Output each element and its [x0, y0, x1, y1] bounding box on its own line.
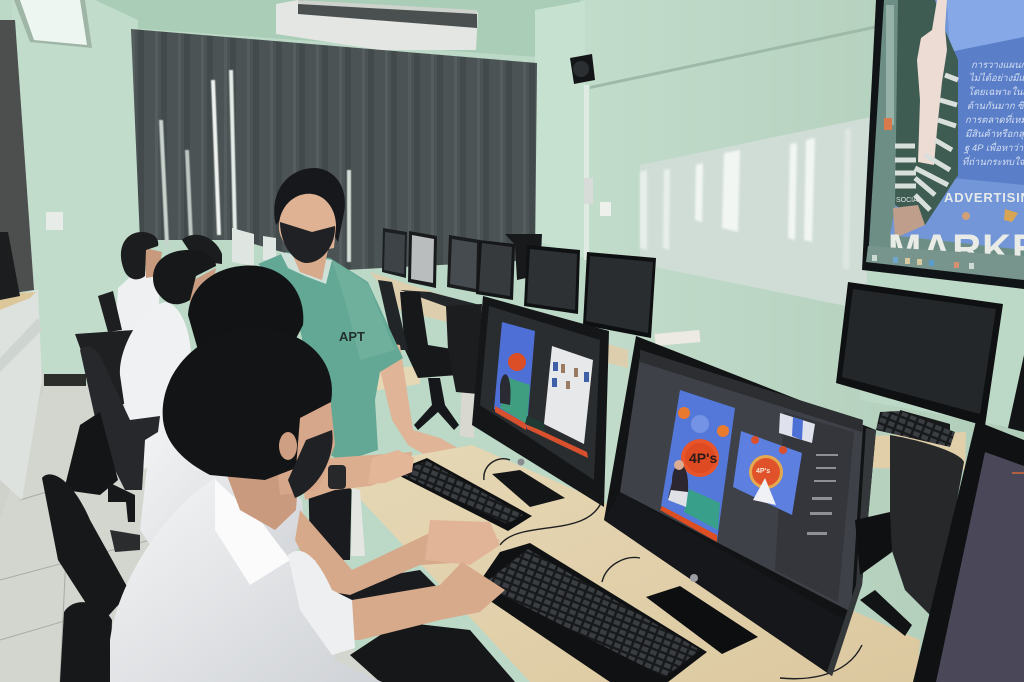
front student in white shirt: [42, 328, 515, 682]
rear seated students: [64, 232, 222, 522]
rear chairs: [42, 474, 140, 682]
poster A: 4P's: [689, 450, 717, 466]
dark trousers behind arms: [330, 570, 440, 610]
right tools panel: [775, 412, 854, 602]
screen taskbar: [866, 246, 1024, 280]
window blinds: [131, 29, 537, 270]
poster A: [660, 390, 735, 542]
poster on monitor: [494, 322, 535, 428]
whiteboard: [640, 117, 871, 310]
dark trousers: [350, 622, 515, 682]
right side monitor on far desk: [655, 282, 1024, 470]
corner monitor bottom right: [913, 421, 1024, 682]
left wall desk: [0, 232, 42, 500]
front keyboard: [474, 543, 707, 682]
keyboard near middle monitor: [392, 458, 532, 531]
large front monitor showing design software: [604, 336, 876, 676]
speaker: [570, 54, 595, 84]
ceiling light: [14, 0, 92, 48]
cables: [484, 459, 862, 679]
wall switch plates: [46, 178, 611, 230]
face mask: [288, 430, 333, 498]
teacher in green polo and face mask: [258, 168, 465, 560]
second monitor showing poster: [472, 296, 609, 507]
forearm on keyboard: [328, 562, 505, 640]
neck: [288, 245, 328, 280]
ear: [279, 432, 297, 460]
monitor stand: [492, 470, 565, 507]
hair: [274, 168, 345, 242]
back row of computer monitors: [232, 228, 656, 338]
face: [270, 395, 335, 495]
second seated student: [140, 265, 500, 610]
navigator thumbnail: [779, 413, 815, 443]
face: [279, 194, 336, 255]
neck: [225, 455, 300, 530]
student far back: [98, 232, 222, 335]
teacher arm: [368, 340, 465, 458]
poster B: [733, 431, 802, 515]
front right desk: [350, 445, 920, 682]
shirt logo: APT: [339, 329, 365, 344]
screen arm and pointing hand: [917, 0, 947, 165]
air conditioner: [276, 0, 478, 50]
back desks: [362, 272, 628, 438]
skin of lower hand: [893, 205, 925, 238]
monitor bezel lower edge: [604, 492, 848, 676]
gallery panel on monitor: [544, 346, 593, 444]
white school shirt: [110, 478, 382, 682]
black face mask: [280, 222, 335, 263]
middle seated student with black chair: [64, 250, 216, 522]
projector screen: [862, 0, 1024, 289]
back office chairs: [378, 280, 482, 430]
monitor stand: [646, 586, 758, 654]
Thai paragraph lines: [962, 60, 1024, 168]
striped sleeve: [895, 75, 958, 210]
teacher legs: [308, 460, 352, 560]
software toolbar: [886, 5, 894, 125]
polo shirt: [258, 252, 403, 462]
black office chair right: [855, 435, 964, 636]
projector screen: SOCIAL: [896, 197, 922, 204]
poster B: 4P's: [756, 468, 770, 475]
hair: [163, 328, 332, 480]
